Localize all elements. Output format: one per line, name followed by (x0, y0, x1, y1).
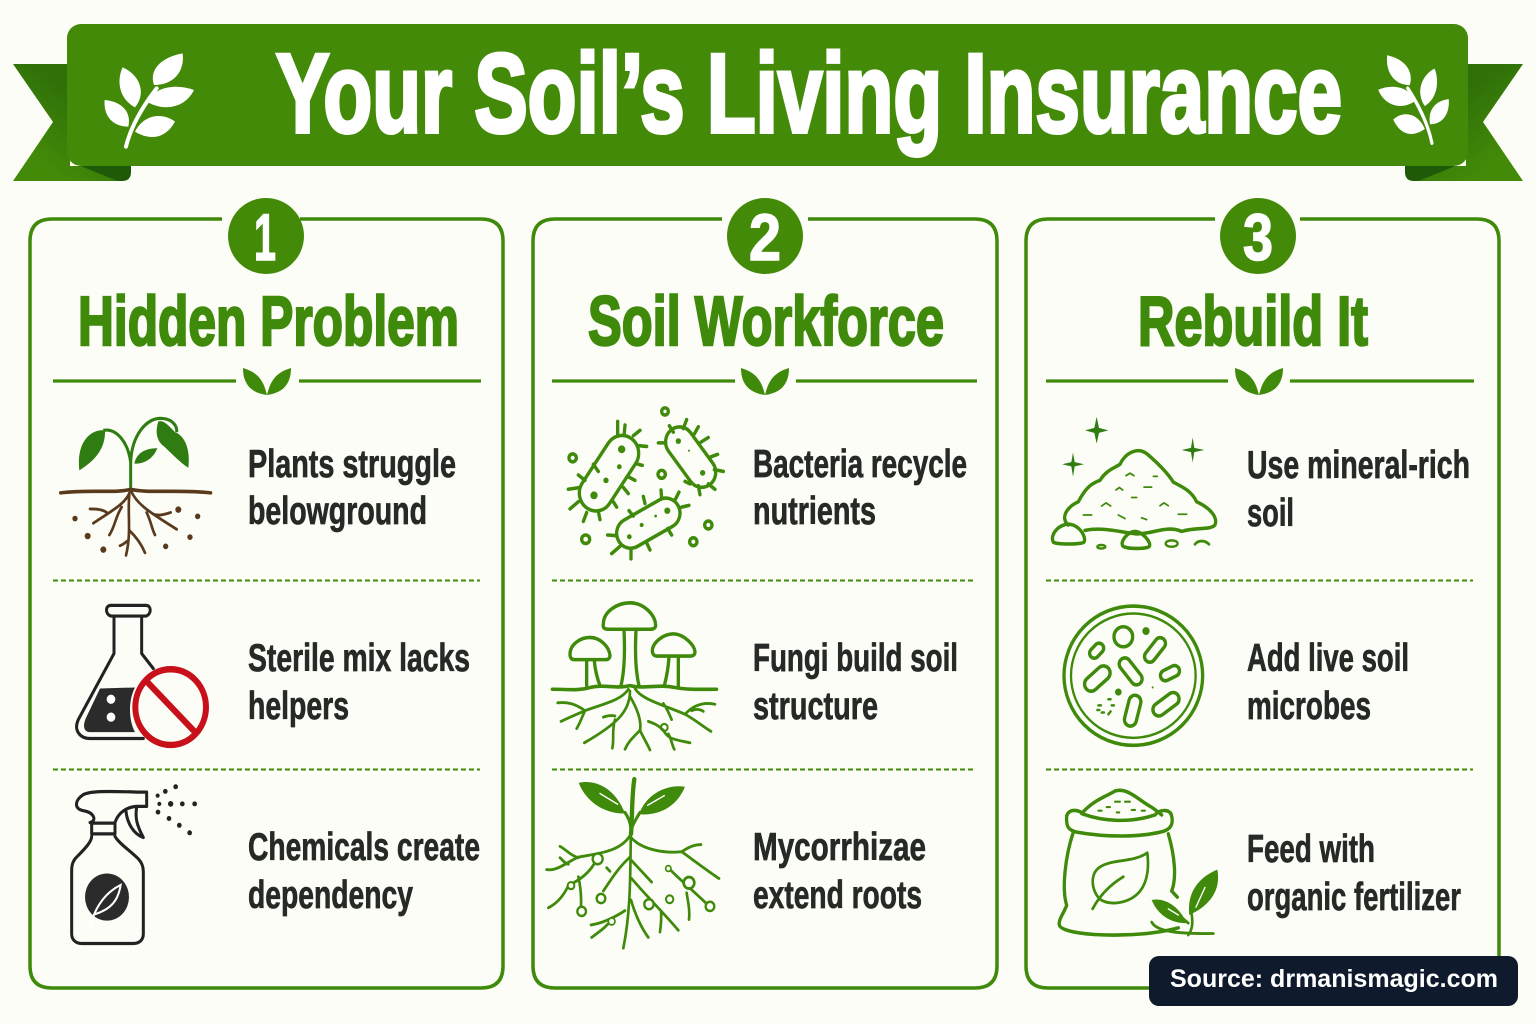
text: row 2: Sterile mix lacks (248, 637, 470, 680)
text: row 1 (248, 443, 456, 533)
panel: hidden problem (30, 198, 503, 988)
text: row 1 (1247, 444, 1470, 535)
number badge 3 (1220, 198, 1296, 274)
text: row 3: extend roots (753, 874, 922, 917)
icon: flask with prohibition sign (77, 605, 206, 745)
heading: Rebuild It (1138, 282, 1368, 360)
icon: fertilizer bag (1059, 790, 1218, 935)
text: row 1 (753, 443, 967, 533)
source badge: Source: drmanismagic.com (1170, 965, 1498, 993)
banner body (67, 24, 1468, 166)
text: row 2 (753, 637, 958, 728)
text: row 3: Mycorrhizae (753, 826, 926, 869)
text: row 2: Fungi build soil (753, 637, 958, 680)
text: row 2: microbes (1247, 685, 1371, 728)
text: row 3 (248, 826, 480, 917)
number badge 3: 3 (1243, 200, 1273, 274)
text: row 3 (753, 826, 926, 917)
icon: spray bottle (72, 784, 197, 944)
panel: soil workforce (533, 198, 997, 988)
number badge 1 (228, 198, 304, 274)
text: row 1: Bacteria recycle (753, 443, 967, 486)
text: row 2: Add live soil (1247, 637, 1409, 680)
text: row 1: soil (1247, 492, 1294, 535)
icon: petri dish (1064, 606, 1203, 745)
panel: rebuild it (1026, 198, 1499, 988)
ribbon tail left (13, 64, 131, 181)
card outline (533, 219, 997, 988)
title banner (13, 24, 1523, 181)
text: row 3 (1247, 828, 1461, 919)
card outline (1026, 219, 1499, 988)
source badge (1149, 956, 1518, 1006)
banner leaf icon left (105, 53, 194, 147)
heading: Soil Workforce (588, 282, 944, 360)
banner leaf icon right (1378, 55, 1449, 143)
number badge 2: 2 (749, 200, 781, 274)
text: row 3: Feed with (1247, 828, 1375, 871)
text: row 2: helpers (248, 685, 349, 728)
text: row 3: dependency (248, 874, 413, 917)
heading divider (53, 368, 481, 395)
heading: Hidden Problem (78, 282, 459, 360)
number badge 1: 1 (254, 200, 276, 274)
number badge 2 (727, 198, 803, 274)
icon: mineral soil pile (1052, 417, 1216, 549)
text: row 3: Chemicals create (248, 826, 480, 869)
icon: plant with roots (61, 418, 211, 555)
heading divider (552, 368, 977, 395)
text: row 2 (248, 637, 470, 728)
heading divider (1046, 368, 1474, 395)
card outline (30, 219, 503, 988)
text: row 1: belowground (248, 490, 427, 533)
icon: bacteria (568, 408, 723, 559)
text: row 2 (1247, 637, 1409, 728)
ribbon tail right (1405, 64, 1523, 181)
text: row 2: structure (753, 685, 878, 728)
icon: fungi (552, 603, 717, 750)
text: row 1: nutrients (753, 490, 876, 533)
icon: mycorrhizae (547, 779, 719, 948)
text: row 1: Plants struggle (248, 443, 456, 486)
